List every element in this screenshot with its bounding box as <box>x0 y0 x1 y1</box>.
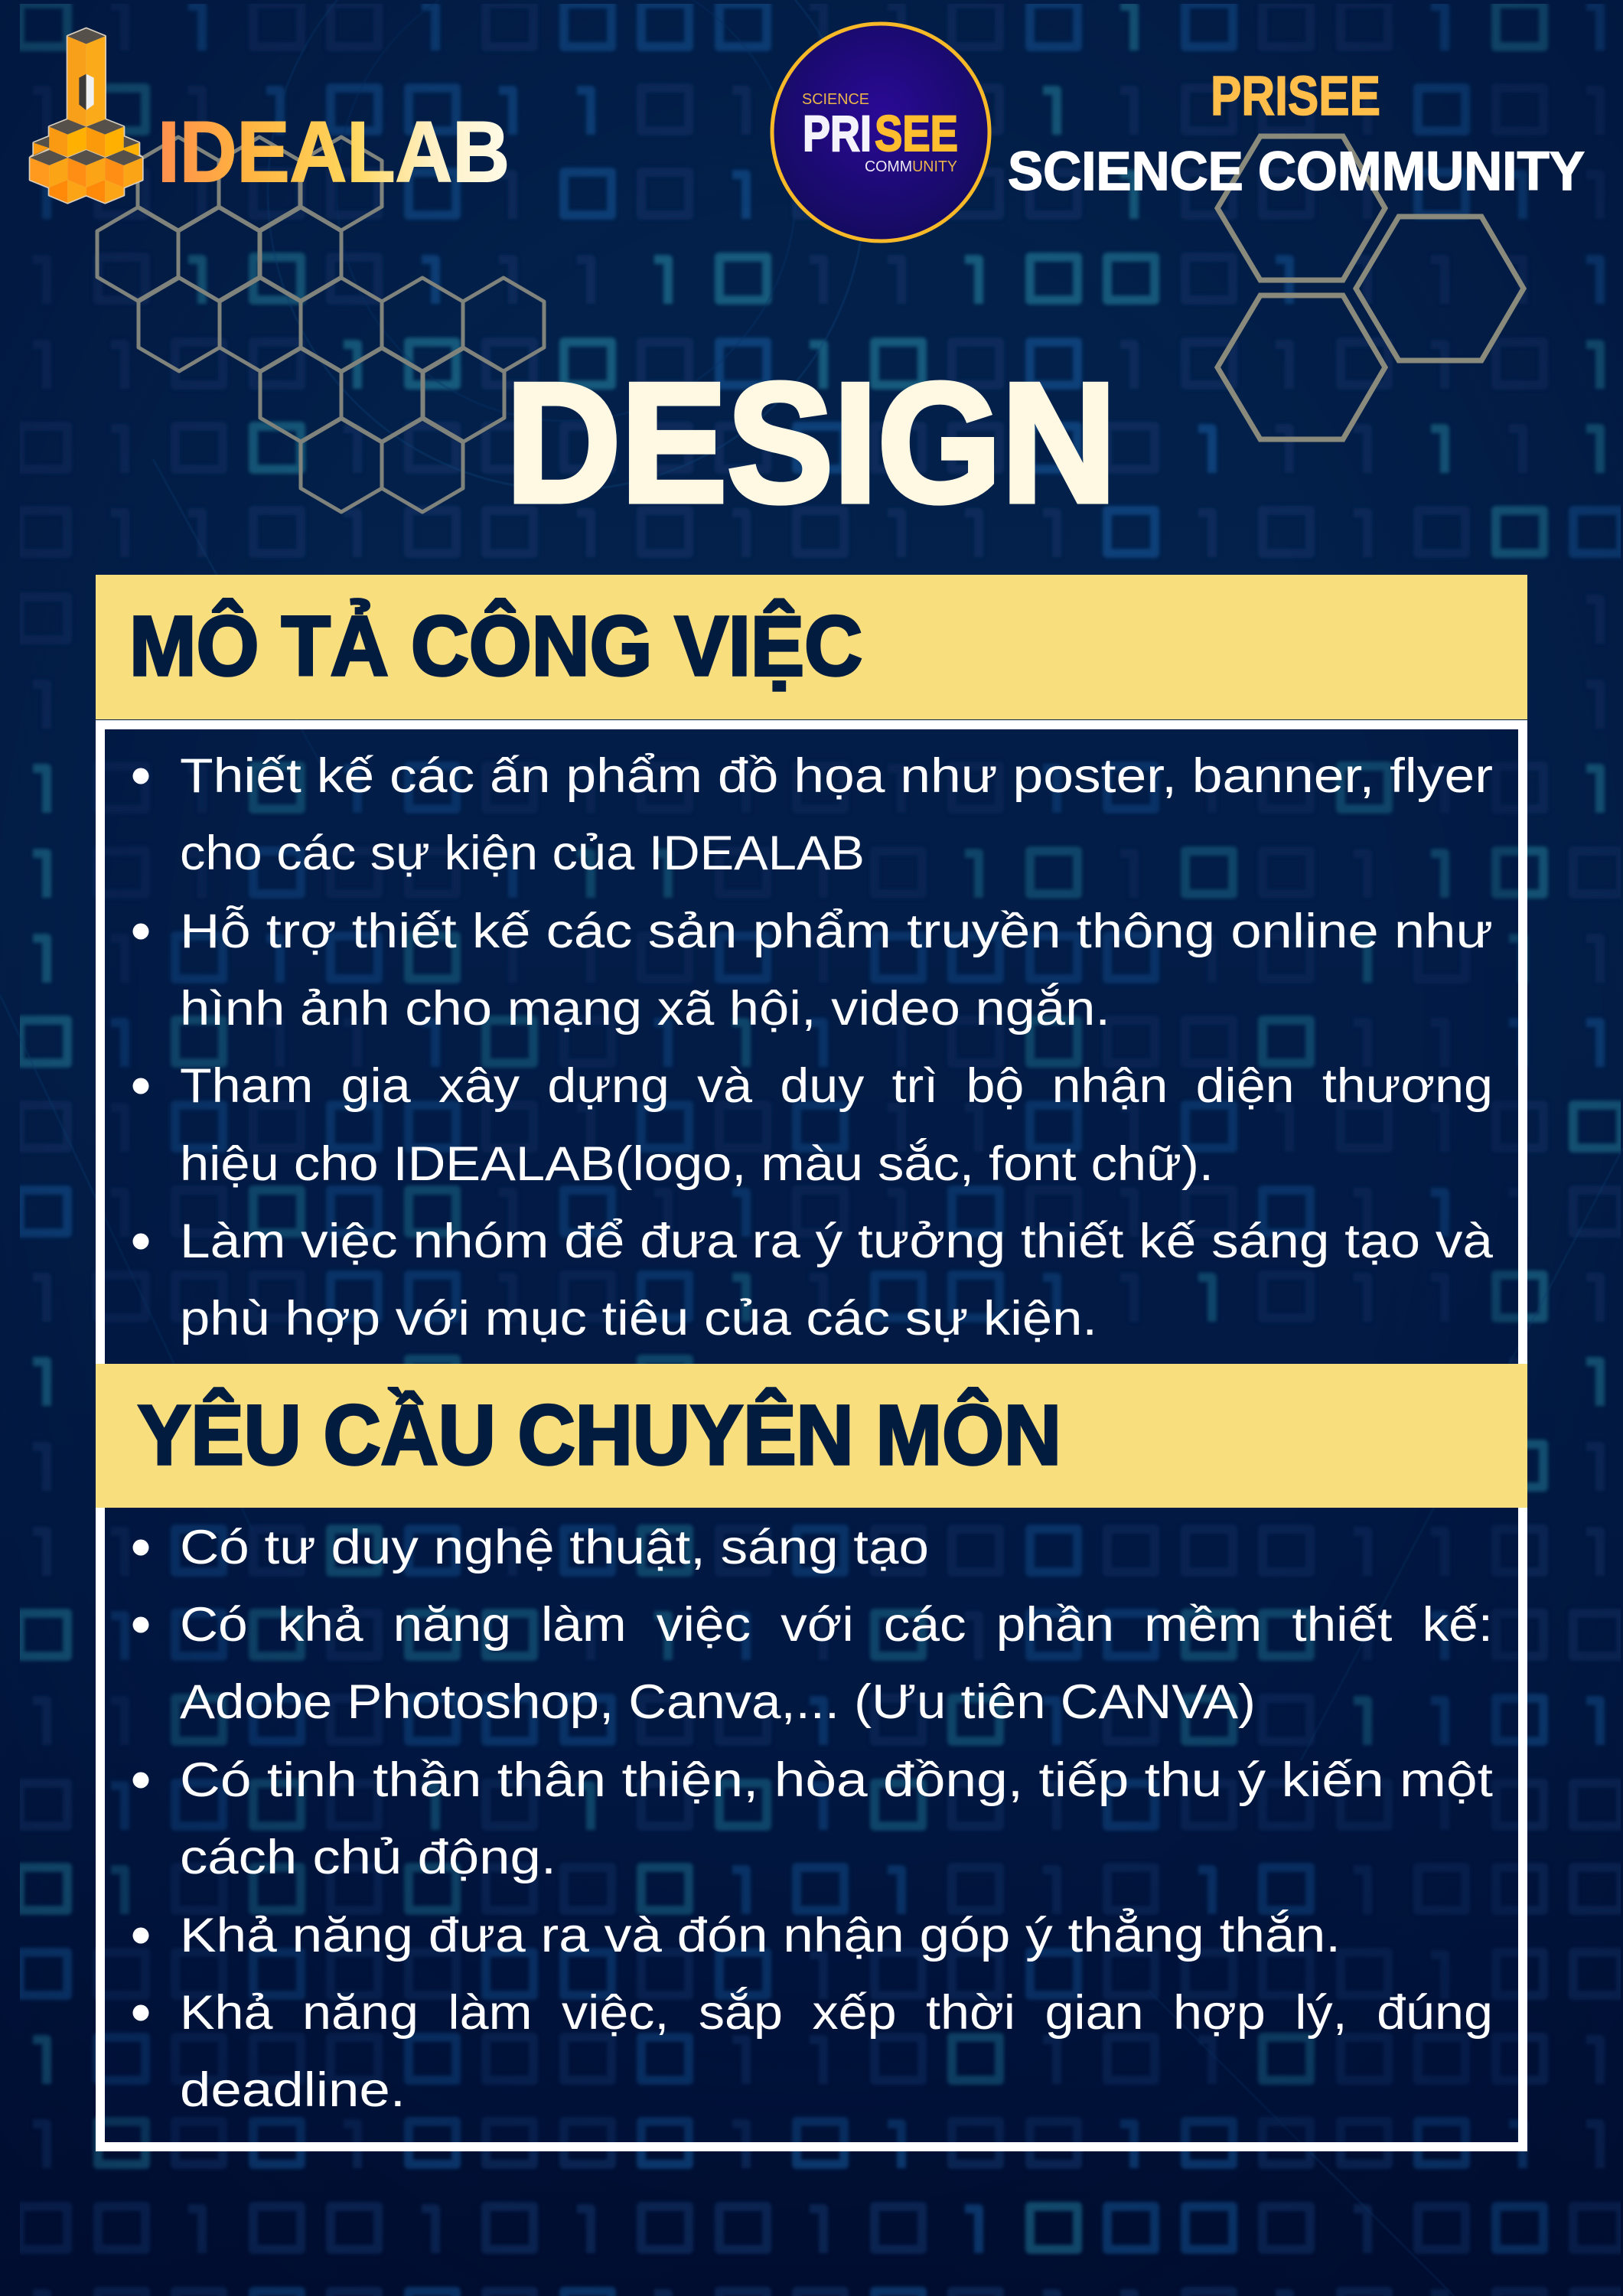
bullet 5 <box>133 1986 1493 2117</box>
badge circle <box>772 24 989 241</box>
logo wordmark: IDEALAB <box>158 104 510 200</box>
bullet 2 <box>133 905 1493 1035</box>
bullet 1: Thiết kế các ấn phẩm đồ họa như poster, banner, flyer <box>180 749 1493 803</box>
bullet 1: Có tư duy nghệ thuật, sáng tạo <box>180 1521 929 1574</box>
panel: job description <box>96 575 1527 1345</box>
bullet 2: hình ảnh cho mạng xã hội, video ngắn. <box>180 982 1110 1035</box>
honeycomb decoration: left <box>97 137 544 512</box>
content frame <box>100 725 1523 2147</box>
section header bar: job description <box>96 575 1527 719</box>
bullet 3: hiệu cho IDEALAB(logo, màu sắc, font chữ). <box>180 1137 1214 1191</box>
bullet list: requirements <box>133 1521 1494 2117</box>
bullet 2: Adobe Photoshop, Canva,... (Ưu tiên CANVA) <box>180 1675 1256 1729</box>
badge name part: SEE: SEE <box>875 105 958 161</box>
bullet 5: deadline. <box>180 2063 406 2117</box>
bullet 2: Có khả năng làm việc với các phần mềm thiết kế: <box>180 1598 1493 1652</box>
bullet 3: Tham gia xây dựng và duy trì bộ nhận diện thương <box>180 1059 1493 1113</box>
heading: PRISEE Science Community <box>1008 66 1585 202</box>
badge bottom label: COMMUNITY <box>865 158 957 175</box>
bullet 5: Khả năng làm việc, sắp xếp thời gian hợp lý, đúng <box>180 1986 1493 2040</box>
organisation subtitle: SCIENCE COMMUNITY <box>1008 142 1585 202</box>
bullet 2: Hỗ trợ thiết kế các sản phẩm truyền thông online như <box>180 905 1493 958</box>
bullet list: job description <box>133 749 1494 1345</box>
bullet 4 <box>133 1215 1494 1345</box>
section header bar: requirements: YÊU CẦU CHUYÊN MÔN <box>138 1388 1061 1482</box>
bullet 3 <box>133 1753 1494 1884</box>
logo: PRISEE badge <box>772 24 989 241</box>
bullet 2 <box>133 1598 1493 1729</box>
bullet 3 <box>133 1059 1493 1191</box>
badge top label: SCIENCE <box>802 91 869 108</box>
bullet 4: Làm việc nhóm để đưa ra ý tưởng thiết kế sáng tạo và <box>180 1215 1494 1268</box>
bullet 3: Có tinh thần thân thiện, hòa đồng, tiếp thu ý kiến một <box>180 1753 1494 1807</box>
section header bar: job description: MÔ TẢ CÔNG VIỆC <box>129 599 862 693</box>
icon: orange honeycomb tower <box>30 28 142 203</box>
bullet 3: cách chủ động. <box>180 1831 556 1884</box>
bullet 1: cho các sự kiện của IDEALAB <box>180 827 865 880</box>
panel: professional requirements <box>96 1364 1527 2117</box>
logo: IDEALAB <box>30 28 510 203</box>
badge name part: PRI: PRI <box>803 105 872 161</box>
bullet 4: Khả năng đưa ra và đón nhận góp ý thẳng thắn. <box>180 1908 1341 1962</box>
bullet 1 <box>133 749 1493 880</box>
organisation name: PRISEE <box>1211 66 1380 127</box>
honeycomb decoration: right <box>1217 136 1524 439</box>
title: DESIGN <box>506 348 1116 538</box>
bullet 4: phù hợp với mục tiêu của các sự kiện. <box>180 1292 1097 1345</box>
section header bar: requirements <box>96 1364 1527 1508</box>
